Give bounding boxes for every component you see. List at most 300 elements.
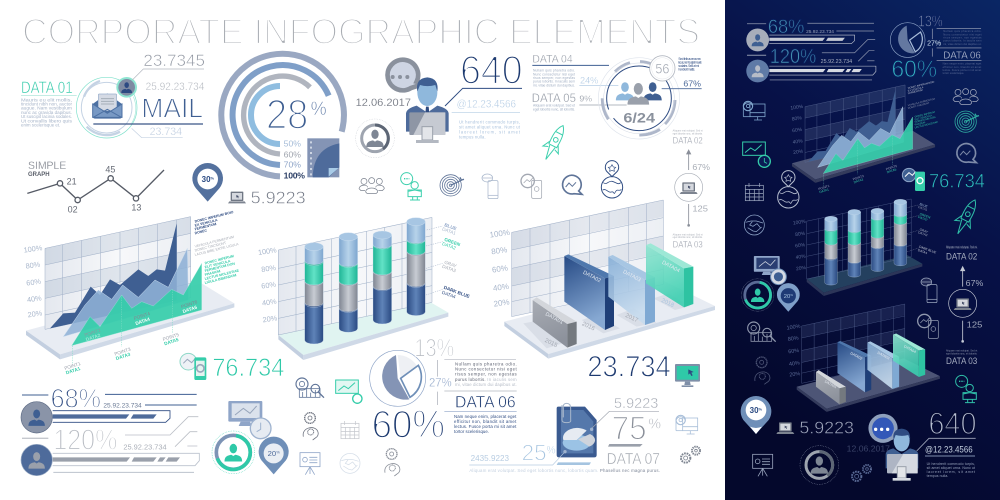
- chart: pie: [370, 350, 426, 406]
- bar labels: DATA01: [544, 311, 564, 326]
- dark label: data 02: Aliquam erat volutpat. Sed et: [946, 246, 978, 249]
- legend labels: DATA1: [441, 226, 457, 236]
- dark axis labels: [790, 104, 804, 156]
- legend labels: [426, 222, 470, 304]
- dark axis labels: 100%: [786, 324, 801, 332]
- legend notes: LECTUS MOLESTIAE: [204, 268, 240, 281]
- value: 120 percent: 120%: [53, 424, 117, 456]
- dark small text: Aliquam erat volutpat. Sed et: [946, 245, 977, 248]
- dark icon: people: [953, 89, 978, 104]
- dark platform: [792, 131, 935, 183]
- data labels: 13: [131, 203, 141, 213]
- dark label: data 03: eget lobortis nunc, sit lobortis.: [946, 352, 978, 355]
- dark axis labels: 60%: [788, 348, 800, 355]
- icon: map pin 20: 20: [268, 449, 276, 458]
- left white background: [0, 0, 725, 500]
- value: 13 percent: 13%: [414, 336, 454, 363]
- label: 23.734: [132, 126, 183, 138]
- legend notes: FERMENTUM: [194, 222, 217, 231]
- dark value: 640: 640: [928, 405, 977, 441]
- text block: data 05: [533, 104, 575, 112]
- icon: clock: [250, 418, 271, 439]
- point labels: POINT5: [162, 332, 180, 342]
- heading: simple graph: GRAPH: [28, 172, 50, 178]
- text block: data 05: Aliquam erat volutpat. Sed et: [533, 104, 575, 108]
- dark legend notes: DONEC IMPERUM BOIO: [908, 80, 935, 90]
- line series: [27, 170, 164, 203]
- dark icon: phone chart: [918, 314, 938, 338]
- panel: pie data 06: [370, 336, 517, 447]
- dark bar labels: DATA04: [903, 344, 917, 354]
- dark grid: [802, 304, 905, 383]
- legend notes: LACUS BIBE ENTIE LIGULA: [194, 242, 240, 257]
- label: second number: 25.92.23.734: [123, 442, 167, 451]
- dark icon: man at monitor: [886, 429, 918, 481]
- dark pie: [890, 23, 925, 57]
- point labels: POINT3: [114, 347, 132, 357]
- legend notes: DONEC: [194, 228, 208, 235]
- dark icon: clock: [771, 269, 786, 285]
- dark icon: user ring: [741, 279, 774, 311]
- dark axis labels: 100%: [793, 219, 807, 227]
- axis labels: 60%: [261, 280, 277, 291]
- wall and grid: [512, 200, 663, 317]
- dark icon: pin 30: %: [759, 406, 763, 411]
- icon: envelope: [93, 93, 122, 119]
- icon: teal monitor: [675, 364, 700, 387]
- dark text block: [927, 462, 975, 478]
- data labels: 45: [105, 164, 115, 174]
- dark icon: chat: [957, 144, 976, 163]
- label: data 02: eget lobortis nunc, sit lobortis.: [673, 132, 703, 135]
- text block: data 01 description: enim scelerisque et.: [21, 123, 60, 128]
- dark icon: head: [755, 357, 770, 384]
- label: 5.9223: [590, 396, 659, 431]
- dark label: data 03: Aliquam erat volutpat. Sed et: [946, 349, 978, 352]
- title: CORPORATE INFOGRAPHIC ELEMENTS: [22, 11, 700, 52]
- dark text block 2: lectus. Fusce porta mi sit amet: [943, 68, 982, 72]
- label: mail: MAIL: [141, 93, 203, 124]
- badge: 56: 56: [655, 61, 670, 77]
- axis labels: 20%: [262, 313, 278, 324]
- icon: calendar: [341, 421, 359, 439]
- axis labels: 40%: [261, 297, 278, 308]
- text block: data 01 description: Ut convallis libero quis: [21, 118, 72, 123]
- icon: map pin 20: %: [276, 449, 280, 454]
- text block: data 06: [454, 414, 517, 434]
- year labels: 2016: [581, 321, 596, 333]
- axis labels: 100%: [257, 245, 278, 257]
- icon: chat bubble: [388, 60, 425, 90]
- legend labels: DATA2: [441, 241, 457, 251]
- dark legend labels: DATA2: [918, 215, 928, 222]
- dark progress bars: [746, 16, 876, 82]
- dark grid: [805, 85, 905, 162]
- dark axis labels: 60%: [795, 242, 806, 249]
- bar labels: DATA03: [622, 269, 642, 284]
- point labels: [64, 289, 200, 375]
- dark axis labels: 40%: [795, 254, 807, 261]
- text block: data 01 description: augue. Nam vestibulum: [21, 106, 73, 111]
- dark text block: mi, vitae dictum dui dapibus ut.: [943, 42, 982, 46]
- dark icon: teal phone: [902, 168, 925, 191]
- text block: side note: hendrerit mattis.: [678, 68, 695, 72]
- axis labels: 60%: [26, 277, 42, 288]
- panel: employee block: [356, 48, 523, 158]
- dark value: 120 percent: 120%: [770, 45, 816, 68]
- dark legend labels: DATA3: [918, 230, 928, 237]
- label: date: 12.06.2017: [356, 97, 411, 109]
- dark point labels: POINT1: [818, 184, 830, 191]
- legend labels: DATA3: [441, 264, 457, 273]
- label: 2435.9223: [469, 450, 591, 465]
- dark point labels: DATA5: [886, 167, 897, 174]
- dark area series: [808, 89, 913, 174]
- heading: simple graph: SIMPLE: [28, 160, 66, 172]
- dark icon: data search: [748, 322, 776, 342]
- dark bar labels: DATA03: [877, 351, 890, 360]
- mail rings: [21, 77, 137, 138]
- label: data 02: Aliquam erat volutpat. Sed et: [673, 130, 703, 133]
- dark icon: target: [955, 111, 979, 132]
- dark point labels: DATA3: [853, 178, 864, 184]
- text block: employee note: tempus nulla.: [459, 134, 486, 139]
- dark platform: [797, 358, 940, 412]
- label: 67 percent: 67%: [683, 79, 701, 89]
- text block: employee note: [459, 119, 521, 139]
- dark axis labels: 20%: [789, 371, 801, 379]
- text block: side note: [678, 57, 702, 72]
- dark bar 68: [769, 35, 855, 44]
- dark chart: cylinders: [793, 199, 937, 296]
- dark legend labels: DATA4: [917, 248, 928, 255]
- laptop data callout: [673, 130, 710, 249]
- legend notes: LIGULA BIBENDUM: [204, 273, 237, 285]
- bar labels: DATA02: [582, 270, 602, 284]
- text block: data 04: Nullam quis pharetra odio.: [533, 69, 575, 73]
- icon: file with pie: [557, 403, 597, 457]
- label: 6/24: 6/24: [623, 109, 655, 125]
- value: 640: 640: [460, 48, 523, 92]
- label: 23.7345: [132, 51, 205, 80]
- axis labels: 80%: [25, 260, 41, 271]
- label: phone number: 25.92.23.734: [146, 81, 204, 93]
- dark grid: [807, 199, 911, 279]
- data labels: 02: [68, 205, 78, 215]
- dark text block: purus lobortis. In iaculis sem: [943, 39, 982, 43]
- icon: team: [616, 82, 662, 105]
- dark arrow: [961, 267, 965, 287]
- dark text block: Ut hendrerit commodo turpis,: [927, 462, 975, 466]
- icon row and rocket: [359, 122, 623, 200]
- text block: data 01 description: nunc ac gravida dapibus.: [21, 110, 72, 115]
- dark chart: bars: [786, 304, 940, 412]
- dark axis labels: 60%: [792, 127, 803, 134]
- icon: pin and globe: [601, 161, 623, 198]
- icon: woman avatar: [21, 402, 52, 433]
- icon: people: [359, 178, 384, 193]
- axis labels: 100%: [23, 243, 43, 255]
- text block: data 06: efficitur non, blandit sit amet: [454, 419, 517, 424]
- dark label: 67 percent: 67%: [966, 278, 984, 288]
- icon: teal person chat: [401, 173, 421, 200]
- label: 5.9223: 5.9223: [614, 396, 658, 412]
- dark point labels: DATA1: [819, 187, 830, 194]
- dark legend labels: GRAY: [919, 227, 929, 234]
- dark label: 125: [961, 319, 983, 343]
- icon: head with gears: [385, 449, 400, 476]
- icon: man at monitor: [406, 77, 449, 143]
- dark axis labels: 80%: [791, 115, 803, 123]
- axis labels: 20%: [493, 298, 510, 309]
- dark icon: avatar ring: [800, 446, 839, 484]
- dark value: 76.734: 76.734: [929, 171, 985, 192]
- value: 75 percent: 75: [612, 410, 647, 447]
- legend notes: FERMENTUM DON: [204, 261, 236, 273]
- point labels: POINT4: [133, 311, 151, 321]
- heading: data 06: DATA 06: [455, 393, 516, 412]
- axis labels: 60%: [491, 264, 508, 275]
- team circle: [598, 58, 680, 139]
- heading: data 04: DATA 04: [532, 54, 573, 66]
- legend labels: DARK BLUE: [443, 285, 470, 299]
- axis labels: 40%: [492, 282, 509, 293]
- label: data 02: DATA 02: [673, 135, 703, 145]
- dark axis labels: 80%: [795, 231, 806, 238]
- icon: screen: [676, 415, 698, 434]
- dark legend notes: ELIT VEHICULA: [914, 114, 933, 121]
- legend notes: EX VEHICULA: [194, 218, 218, 228]
- heading: data 05: [532, 91, 627, 105]
- point labels: DATA6: [182, 305, 198, 314]
- dark avatar: woman: [746, 29, 769, 51]
- chart: radial rings 28%: [221, 54, 344, 180]
- dark bar labels: [824, 344, 917, 389]
- pin 30% and laptop value: [192, 163, 306, 207]
- dark text block: laoreet lorem, sit amet: [927, 470, 975, 474]
- dark icon: laptop circle: [949, 289, 977, 317]
- label: handle: @12.23.4566: [457, 99, 516, 111]
- text block: data 06: Nam neque enim, placerat eget: [454, 414, 517, 419]
- point labels: DATA4: [135, 317, 151, 326]
- axis labels: 20%: [27, 308, 43, 319]
- icon: monitor trend: [336, 380, 362, 403]
- dark text block: Nunc consectetur nisi eget: [943, 32, 982, 36]
- bars: [533, 243, 693, 348]
- wall and grid: [278, 217, 432, 335]
- area series: [50, 223, 202, 346]
- heading: data 07: DATA 07: [607, 451, 660, 468]
- value: 25 percent: %: [547, 444, 556, 456]
- point labels: DATA3: [115, 352, 131, 361]
- text block: side note: sodales. Sed at mi: [678, 64, 699, 68]
- icon: map pin: 30: [202, 175, 211, 184]
- legend notes: ELIT VEHICULA: [204, 259, 231, 269]
- legend labels: BLUE: [444, 222, 457, 231]
- bar labels: DATA04: [661, 260, 681, 274]
- text block: data 04: mi, vitae dictum dui dapibus.: [533, 83, 575, 87]
- dark legend notes: DONEC TINCIDUNT: [908, 102, 930, 110]
- dark icon: pin 20: %: [790, 293, 793, 297]
- platform: [504, 280, 715, 359]
- dark platform: [807, 255, 922, 296]
- ring legend: 60%: [284, 149, 301, 159]
- label: upper value: 67%: [692, 162, 710, 172]
- dark icon: pin 20: [777, 283, 800, 312]
- dark icon: chat bubble: [870, 416, 902, 441]
- badge: 56: [650, 56, 675, 81]
- icon: man avatar: [21, 444, 52, 476]
- dark icon: phone: [921, 278, 937, 303]
- icon: user badge: [116, 77, 137, 98]
- value: 28 percent: 28: [266, 90, 308, 137]
- icon: map pin: %: [211, 175, 215, 180]
- text block: side note: Sed finibus eros nec: [678, 57, 701, 61]
- year labels: 2017: [624, 313, 639, 324]
- panel: 23.734 and data 07: [385, 351, 700, 476]
- point labels: DATA2: [85, 333, 101, 342]
- dark value: 60: 60%: [892, 56, 937, 83]
- text block: data 01 description: tincidunt nibh non, auctor: [21, 102, 73, 107]
- text block: employee note: sit amet aliquet urna. Nunc ut: [459, 124, 521, 129]
- heading: data 01: DATA 01: [21, 78, 73, 97]
- chart: 3d bar chart: [489, 200, 715, 359]
- dark icon: pin 30: 30: [750, 406, 759, 415]
- icon: user progress ring: [356, 119, 394, 158]
- icon: gears: [681, 447, 700, 463]
- dark legend notes: PHASIUM: [914, 121, 926, 127]
- point labels: POINT6: [180, 299, 198, 309]
- label: 23.7345: 23.7345: [143, 51, 205, 70]
- dark point labels: [818, 135, 899, 194]
- heading: simple graph: [28, 160, 66, 178]
- dark legend labels: DATA1: [918, 205, 928, 212]
- icon: target: [440, 175, 464, 196]
- label: 24 percent: 24%: [580, 75, 598, 85]
- dark text block: [943, 29, 982, 46]
- dark legend notes: [908, 80, 939, 129]
- dark legend notes: FERMENTUM DON: [914, 116, 936, 124]
- point labels: POINT2: [84, 328, 102, 338]
- chart: 3d cylinder chart: [257, 217, 470, 360]
- text block: data 04: purus lobortis. In iaculis sem: [533, 80, 575, 84]
- dark pie data 06: [890, 14, 982, 83]
- progress bar 120: [53, 453, 199, 472]
- dark legend notes: EX VEHICULA: [908, 86, 924, 93]
- chart: 3d area chart: [23, 210, 240, 375]
- wall and grid: [45, 217, 191, 329]
- heading: data 05: 9%: [579, 94, 592, 104]
- dark text block 2: efficitur non, blandit sit amet: [943, 65, 982, 69]
- label: data 02: [673, 130, 703, 145]
- arrow up: [687, 150, 691, 170]
- dark value: 13: 13%: [918, 14, 943, 31]
- dark legend notes: LECTUS MOLESTIAE: [914, 121, 939, 129]
- label: 67 percent: [662, 79, 702, 89]
- point labels: POINT1: [64, 361, 82, 371]
- dark axis labels: 80%: [788, 335, 799, 343]
- data labels: [67, 164, 141, 215]
- dark avatar: man: [746, 60, 769, 82]
- text block: data 01 description: Mauris eu elit mollis,: [21, 97, 72, 102]
- label: data 03: [673, 233, 703, 249]
- dark icon: rocket: [950, 196, 983, 238]
- ring legend: 50%: [284, 139, 301, 149]
- ring legend: 70%: [284, 160, 301, 170]
- value: 68 percent: 68%: [51, 384, 101, 414]
- dark icon: laptop: [776, 422, 794, 434]
- axis labels: 80%: [261, 263, 277, 274]
- label: data 03: eget lobortis nunc, sit lobortis.: [673, 236, 703, 239]
- cylinders: [305, 218, 425, 344]
- dark bar labels: DATA02: [849, 351, 863, 361]
- text block: data 04: risus semper, non egestas: [533, 76, 575, 80]
- icon: laptop: [228, 192, 246, 203]
- label: 23.734: 23.734: [150, 126, 182, 138]
- dark point labels: POINT5: [885, 164, 898, 171]
- icon: map pin 20: [259, 437, 289, 474]
- value: 23.734: 23.734: [587, 351, 671, 384]
- text block: data 06: lectus. Fusce porta mi sit amet: [454, 424, 517, 429]
- panel: 76.734 value: [180, 353, 284, 382]
- dark text block 2: Nam neque enim, placerat eget: [943, 62, 982, 66]
- value: 76.734: 76.734: [212, 354, 284, 382]
- dark icon: calendar: [745, 183, 763, 201]
- axis labels: 80%: [491, 245, 508, 256]
- dark icon: teal person: [956, 375, 976, 403]
- dark icon: handshake: [744, 215, 764, 235]
- year labels: [543, 298, 675, 349]
- axis labels: [23, 243, 43, 319]
- dark icon: pin 20: 20: [784, 294, 790, 300]
- icon: teal phone: [180, 353, 206, 380]
- dark label: handle: @12.23.4566: [925, 445, 973, 455]
- dark icon: pin 30: [741, 396, 771, 434]
- panel: mail block: [21, 51, 205, 138]
- dark label: data 03: [946, 349, 978, 366]
- dark value: 68 percent: 68%: [768, 16, 804, 38]
- dark bottom section: [741, 246, 984, 484]
- dark chart: area: [790, 80, 939, 194]
- text block: side note: lacus, non feugiat mauris: [678, 60, 702, 64]
- dark text block: Nullam quis pharetra odio.: [943, 29, 982, 33]
- dark label: first number: 25.92.23.734: [806, 29, 834, 35]
- icon: chat chart: [563, 175, 582, 194]
- dark label: 125: 125: [967, 319, 983, 329]
- platform: [278, 300, 448, 360]
- text block: employee note: laoreet lorem, sit amet: [459, 129, 521, 134]
- dark cylinders: [825, 199, 907, 285]
- dark label: data 03: DATA 03: [946, 356, 977, 366]
- panel: user dashboard cluster: [212, 378, 362, 475]
- icon: teal user ring: [212, 431, 255, 474]
- text block: data 01 description: [21, 97, 73, 128]
- icon: data search: [296, 378, 324, 398]
- legend notes: VEHICULA FERMENTUM: [194, 235, 235, 249]
- label: 24 percent: [579, 75, 618, 85]
- dark legend labels: BLUE: [919, 202, 928, 209]
- dark icon: screen: [743, 101, 765, 120]
- dark label: data 02: [946, 246, 978, 261]
- dark point labels: POINT3: [852, 174, 865, 181]
- dark text block: sit amet aliquet urna. Nunc ut: [927, 466, 975, 470]
- dark axis labels: 20%: [796, 265, 807, 272]
- progress bar 68: [53, 411, 170, 422]
- dark bar 120: [769, 66, 876, 80]
- label: data 03: Aliquam erat volutpat. Sed et: [673, 233, 703, 236]
- dark axis labels: 40%: [792, 138, 804, 146]
- label: 2435.9223: 2435.9223: [471, 453, 509, 463]
